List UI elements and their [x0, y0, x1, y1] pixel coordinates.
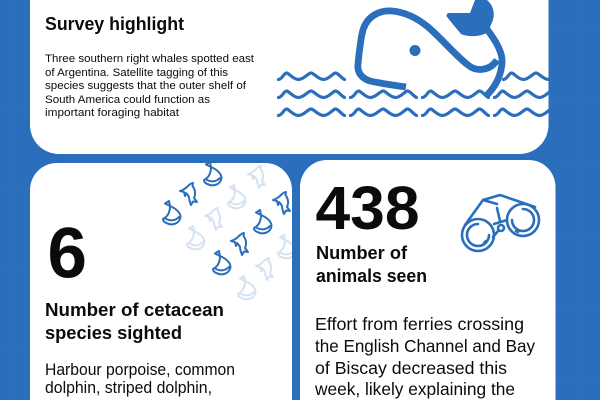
heading: number of cetacean species: species sighted [45, 322, 182, 343]
whale body [358, 11, 497, 87]
panel: survey highlight [30, 0, 570, 154]
whale fluke [447, 0, 494, 36]
text block: survey description: species suggests that the outer shelf of [45, 80, 247, 92]
panel: cetacean species [30, 162, 295, 400]
text block: survey description: Three southern right whales spotted east [45, 53, 255, 65]
icon: whale with waves [278, 0, 570, 116]
panel: animals seen [300, 160, 556, 400]
text block: species list [46, 363, 234, 396]
text block: survey description: important foraging habitat [45, 107, 180, 119]
heading: number of animals seen: Number of [316, 242, 408, 263]
text block: species list: Harbour porpoise, common [45, 361, 235, 379]
whale tail stem [486, 28, 502, 95]
number: 6: 6 [48, 214, 87, 294]
text block: ferry effort: Effort from ferries crossing [315, 314, 524, 334]
icon: binoculars [462, 195, 539, 251]
heading: number of cetacean species [45, 299, 224, 343]
number: 438: 438 [316, 174, 420, 242]
heading: number of animals seen [316, 242, 427, 286]
text block: survey description [45, 53, 255, 119]
text block: ferry effort: week, likely explaining the [314, 379, 515, 399]
icon: whale and dolphin pattern [163, 162, 295, 299]
text block: ferry effort [314, 314, 535, 399]
waves [278, 73, 570, 116]
text block: species list: dolphin, striped dolphin, [45, 379, 212, 397]
whale eye [410, 45, 420, 56]
heading: survey highlight: Survey highlight [45, 13, 185, 34]
heading: number of cetacean species: Number of cetacean [45, 299, 224, 320]
text block: ferry effort: of Biscay decreased this [315, 358, 507, 378]
text block: survey description: of Argentina. Satellite tagging of this [45, 67, 228, 79]
heading: number of animals seen: animals seen [316, 265, 427, 286]
text block: survey description: South America could function as [45, 94, 210, 106]
text block: ferry effort: the English Channel and Bay [315, 336, 535, 356]
